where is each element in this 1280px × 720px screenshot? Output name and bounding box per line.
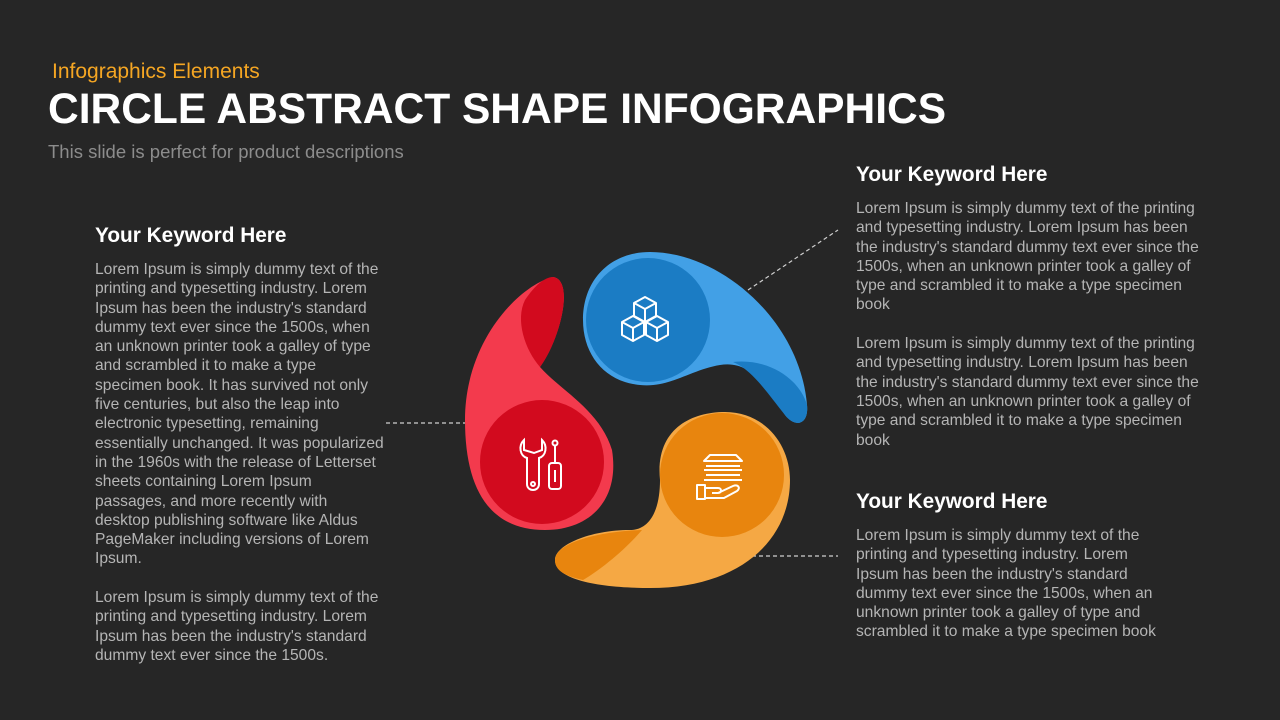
shape: red — [465, 277, 613, 530]
left text block: Your Keyword Here — [95, 224, 286, 247]
bottom right text block: Lorem Ipsum is simply dummy text of the printing and typesetting industry. Lorem Ipsum has been the industry's standard dummy text ever since the 1500s, when an unknown printer took a galley of type and scrambled it to make a type specimen book — [856, 527, 1156, 640]
icon: cubes — [622, 297, 668, 341]
left text block: Lorem Ipsum is simply dummy text of the printing and typesetting industry. Lorem Ipsum has been the industry's standard dummy text ever since the 1500s. — [95, 589, 378, 664]
subtitle label: Infographics Elements — [52, 60, 260, 83]
shape: blue — [583, 252, 807, 423]
icon: tools — [520, 440, 561, 490]
top right text block — [856, 163, 1199, 449]
bottom right text block: Your Keyword Here — [856, 490, 1047, 513]
left text block: Lorem Ipsum is simply dummy text of the printing and typesetting industry. Lorem Ipsum has been the industry's standard dummy text ever since the 1500s, when an unknown printer took a galley of type and scrambled it to make a type specimen book. It has survived not only five centuries, but also the leap into electronic typesetting, remaining essentially unchanged. It was popularized in the 1960s with the release of Letterset sheets containing Lorem Ipsum passages, and more recently with desktop publishing software like Aldus PageMaker including versions of Lorem Ipsum. — [95, 261, 384, 567]
description: This slide is perfect for product descriptions — [48, 141, 404, 162]
icon: hand with layers — [697, 455, 742, 499]
title: CIRCLE ABSTRACT SHAPE INFOGRAPHICS — [48, 86, 946, 133]
top right text block: Lorem Ipsum is simply dummy text of the printing and typesetting industry. Lorem Ipsum has been the industry's standard dummy text ever since the 1500s, when an unknown printer took a galley of type and scrambled it to make a type specimen book — [856, 335, 1199, 449]
top right text block: Your Keyword Here — [856, 163, 1047, 186]
left text block — [95, 224, 384, 664]
shape: orange — [555, 412, 790, 588]
top right text block: Lorem Ipsum is simply dummy text of the printing and typesetting industry. Lorem Ipsum has been the industry's standard dummy text ever since the 1500s, when an unknown printer took a galley of type and scrambled it to make a type specimen book — [856, 200, 1199, 313]
